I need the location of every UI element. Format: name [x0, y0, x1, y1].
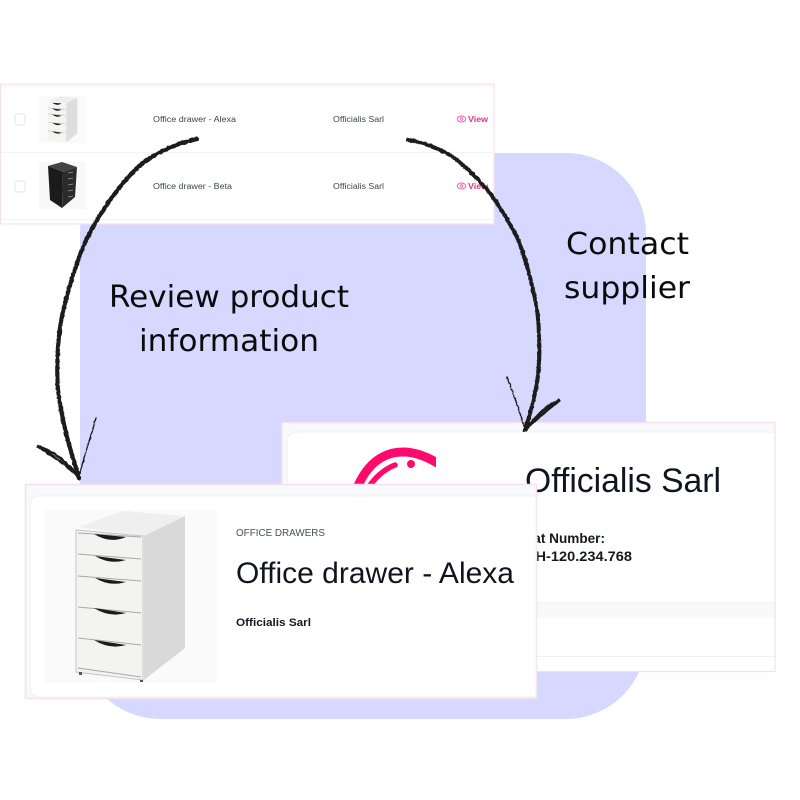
product image: white drawer unit	[44, 510, 217, 683]
supplier heading: Officialis Sarl	[525, 462, 721, 500]
label: review product information: information	[139, 324, 319, 359]
panel: product card	[26, 484, 536, 698]
view link: View	[468, 115, 489, 124]
product name: Office drawer - Alexa	[153, 115, 237, 124]
label: review product information	[109, 280, 349, 359]
arrow: supplier name to supplier card	[408, 140, 560, 430]
VAT number: CH-120.234.768	[525, 549, 633, 564]
panel: product table	[0, 84, 494, 224]
checkbox: row one	[15, 114, 25, 125]
label: review product information: Review product	[109, 280, 349, 315]
view link	[457, 115, 489, 124]
view link	[457, 182, 489, 191]
icon: supplier logo	[357, 452, 442, 488]
product heading: Office drawer - Alexa	[236, 557, 515, 590]
view link: View	[468, 182, 489, 191]
category label: OFFICE DRAWERS	[236, 527, 325, 539]
label: contact supplier	[564, 227, 691, 306]
background rounded lavender panel	[80, 153, 646, 719]
thumbnail: black drawer	[39, 162, 86, 209]
supplier name: Officialis Sarl	[333, 182, 384, 191]
label: contact supplier: supplier	[564, 271, 691, 306]
table row: Office drawer Beta	[15, 162, 489, 209]
table row: Office drawer Alexa	[15, 96, 489, 143]
label: contact supplier: Contact	[566, 227, 689, 262]
supplier name: Officialis Sarl	[333, 115, 384, 124]
product name: Office drawer - Beta	[153, 182, 233, 191]
thumbnail: white drawer	[39, 96, 86, 143]
arrow: product row to product card	[37, 139, 197, 478]
panel: supplier card	[282, 422, 775, 672]
supplier name: Officialis Sarl	[236, 617, 311, 629]
VAT number	[525, 531, 633, 564]
VAT number: Vat Number:	[525, 531, 605, 546]
checkbox: row two	[15, 181, 25, 192]
